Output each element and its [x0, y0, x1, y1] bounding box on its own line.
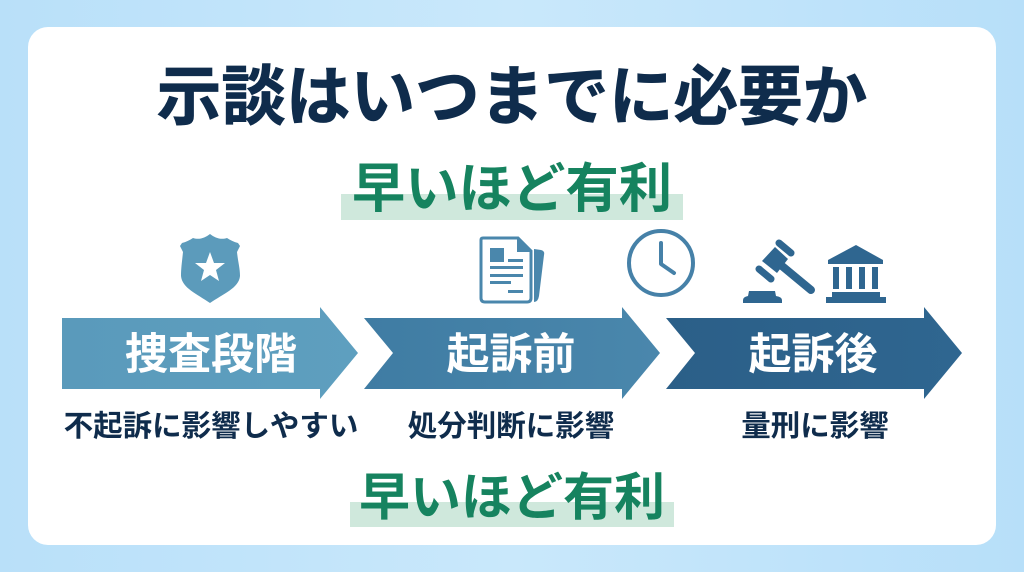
caption: after indictment: 量刑に影響 — [741, 410, 889, 443]
title: 示談はいつまでに必要か — [157, 61, 867, 133]
arrow: before indictment: 起訴前 — [446, 331, 576, 379]
arrow: investigation stage: 捜査段階 — [125, 331, 297, 379]
bottom highlight: earlier is better: 早いほど有利 — [359, 469, 665, 526]
arrow: after indictment: 起訴後 — [748, 331, 878, 379]
arrow: before indictment — [364, 307, 660, 399]
caption: investigation stage: 不起訴に影響しやすい — [64, 410, 358, 443]
icon: police badge — [180, 234, 240, 303]
top highlight: earlier is better: 早いほど有利 — [352, 160, 672, 219]
icon: documents — [481, 238, 544, 302]
arrow: investigation stage — [62, 307, 358, 399]
caption: before indictment: 処分判断に影響 — [408, 410, 614, 443]
arrow: after indictment — [666, 307, 962, 399]
icon: courthouse — [826, 245, 886, 303]
icon: clock — [629, 231, 693, 295]
icon: gavel — [743, 243, 811, 303]
